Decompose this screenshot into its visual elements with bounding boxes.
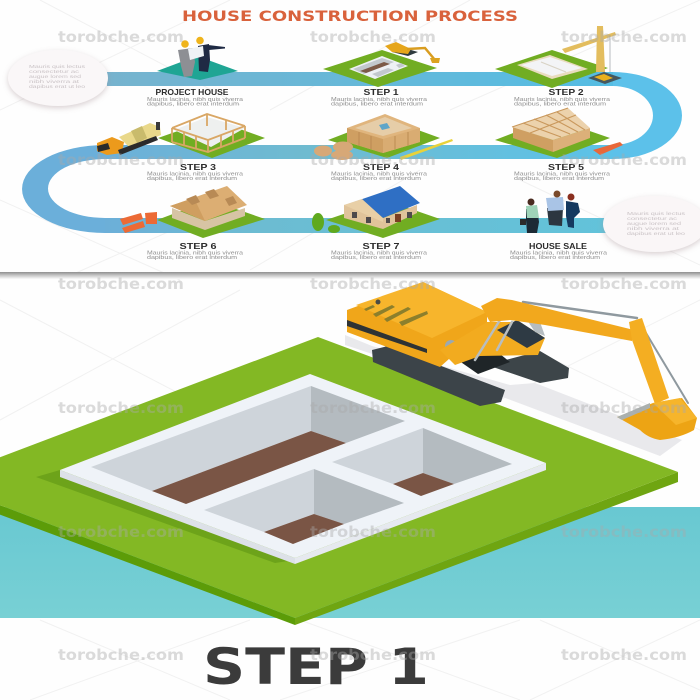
label: step 7: dapibus, libero erat interdum (331, 255, 421, 261)
label: step 5: dapibus, libero erat interdum (514, 176, 604, 182)
label: step 4: Mauris lacinia, nibh quis viverra (331, 172, 428, 178)
callout: right circle: consectetur ac (627, 216, 678, 221)
callout: left circle: consectetur ac (29, 69, 80, 74)
icon: step 2 slab and crane (495, 26, 622, 88)
stick (629, 318, 669, 404)
label: step 6: Mauris lacinia, nibh quis viverra (147, 250, 244, 256)
callout: right circle: augue lorem sed (627, 221, 682, 226)
watermarks: torobche.com (58, 151, 184, 169)
label: project house: dapibus, libero erat interdum (147, 102, 239, 108)
cab (440, 320, 545, 365)
foundation (36, 374, 546, 564)
callout: left circle: dapibus erat ut leo (29, 84, 86, 89)
watermarks: torobche.com (58, 523, 184, 541)
rods (475, 302, 688, 403)
icon: house sale people (520, 190, 580, 233)
watermarks: torobche.com (310, 151, 436, 169)
title: HOUSE CONSTRUCTION PROCESS (182, 9, 518, 25)
callout: right circle: dapibus erat ut leo (627, 231, 686, 236)
label: step 7 (331, 241, 428, 261)
label: step 5 (514, 162, 611, 182)
winding path ribbon (22, 72, 682, 233)
watermarks: torobche.com (58, 646, 184, 664)
label: step 2: STEP 2 (548, 87, 584, 97)
callout: left circle: augue lorem sed (29, 74, 82, 79)
watermarks: torobche.com (58, 28, 184, 46)
label: step 2: Mauris lacinia, nibh quis viverra (514, 97, 611, 103)
callout: right circle: Mauris quis lectus (627, 211, 686, 216)
bottom pit (204, 469, 404, 544)
excavator (347, 282, 697, 440)
boom (481, 298, 634, 341)
label: step 2 (514, 87, 611, 108)
watermarks: torobche.com (561, 151, 687, 169)
icon: small excavator (385, 42, 440, 63)
label: step 5: STEP 5 (548, 162, 584, 172)
label: project house (147, 87, 244, 108)
main pit (91, 386, 405, 504)
label: step 1: STEP 1 (364, 87, 399, 97)
icon: step 3 frame and mixer truck (97, 114, 265, 158)
callout: left circle: nibh viverra at (29, 79, 80, 84)
label: step 4 (331, 162, 428, 182)
label: step 6: dapibus, libero erat interdum (147, 255, 237, 261)
label: project house: Mauris lacinia, nibh quis viverra (147, 97, 244, 103)
icon: mixer truck (97, 122, 161, 155)
label: step 2: dapibus, libero erat interdum (514, 102, 606, 108)
label: step 3: dapibus, libero erat interdum (147, 176, 237, 182)
label: step 7: Mauris lacinia, nibh quis viverra (331, 250, 428, 256)
icon: trees (312, 213, 340, 233)
label: house sale: dapibus, libero erat interdum (510, 255, 600, 261)
watermarks: torobche.com (561, 646, 687, 664)
icon: step 7 finished house (312, 186, 440, 238)
watermarks: torobche.com (58, 275, 184, 293)
label: step 3: STEP 3 (180, 162, 216, 172)
green ground plot (0, 337, 678, 625)
label: house sale (510, 241, 608, 261)
label: step 7: STEP 7 (362, 241, 400, 251)
icon: spirit level (400, 139, 453, 160)
label: step 5: Mauris lacinia, nibh quis viverra (514, 172, 611, 178)
watermarks: torobche.com (561, 399, 687, 417)
icon: brick stacks (120, 212, 157, 233)
label: step 1 (331, 87, 428, 108)
watermarks: torobche.com (561, 275, 687, 293)
label: step 3 (147, 162, 244, 182)
label: step 1: dapibus, libero erat interdum (331, 102, 423, 108)
label: step 4: dapibus, libero erat interdum (331, 176, 421, 182)
near track (372, 346, 505, 406)
watermarks: torobche.com (561, 28, 687, 46)
water band (0, 507, 700, 618)
watermarks: torobche.com (561, 523, 687, 541)
heading: step 1: STEP 1 (203, 638, 429, 696)
watermarks: torobche.com (310, 646, 436, 664)
bucket (617, 398, 697, 440)
callout: right circle (603, 196, 700, 252)
watermarks: torobche.com (310, 523, 436, 541)
label: project house: PROJECT HOUSE (156, 87, 229, 97)
icon: stones (314, 142, 353, 160)
label: step 3: Mauris lacinia, nibh quis viverra (147, 172, 244, 178)
label: house sale: HOUSE SALE (529, 241, 587, 251)
far track (490, 351, 569, 383)
right pit (332, 428, 512, 496)
watermarks: torobche.com (310, 28, 436, 46)
icon: bricks (593, 142, 623, 155)
watermarks: torobche.com (58, 399, 184, 417)
label: step 6 (147, 241, 244, 261)
callout: left circle (8, 50, 108, 106)
icon: step 5 roof frame (495, 108, 623, 158)
label: step 1: Mauris lacinia, nibh quis viverra (331, 97, 428, 103)
callout: left circle: Mauris quis lectus (29, 64, 86, 69)
callout: right circle: nibh viverra at (627, 226, 680, 231)
panel: process overview (8, 9, 700, 261)
body (347, 282, 487, 367)
icon: step 1 foundation (323, 42, 440, 87)
icon: step 4 walls (314, 114, 453, 160)
label: house sale: Mauris lacinia, nibh quis viverra (510, 250, 608, 256)
icon: project house planners (157, 37, 238, 80)
label: step 6: STEP 6 (180, 241, 217, 251)
icon: step 6 wooden house (120, 186, 265, 238)
panel: step 1 detail illustration (0, 282, 700, 696)
watermarks: torobche.com (310, 275, 436, 293)
excavator ground shadow (345, 335, 682, 456)
label: step 4: STEP 4 (363, 162, 399, 172)
watermarks: torobche.com (310, 399, 436, 417)
